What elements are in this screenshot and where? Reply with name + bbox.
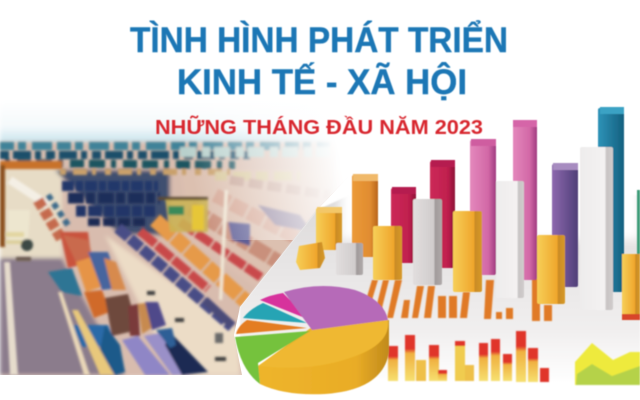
slice: teal (243, 303, 307, 323)
slice: violet (284, 286, 388, 330)
left row of containers (38, 200, 62, 240)
title line 1: TÌNH HÌNH PHÁT TRIỂN (130, 20, 508, 60)
chart: 3D pie (235, 286, 389, 394)
road markings (4, 262, 18, 375)
dark container stacks back (62, 181, 158, 191)
slice: magenta (260, 293, 310, 320)
slice: green (235, 331, 310, 384)
bar: white tall (580, 147, 613, 310)
tree line (0, 142, 330, 150)
bar: pink left (470, 139, 496, 275)
bar: silver cube (336, 243, 363, 275)
bar: orange tall (352, 174, 378, 257)
chart: small orange bars (366, 278, 552, 321)
title line 2: KINH TẾ - XÃ HỘI (177, 62, 467, 102)
bar: crimson centre (430, 160, 455, 268)
bar: orange small (316, 207, 342, 250)
bar: gold cube (296, 242, 325, 270)
subtitle: NHỮNG THÁNG ĐẦU NĂM 2023 (155, 115, 483, 139)
chart: yellow-green area (575, 343, 640, 385)
bar: pink right (513, 120, 537, 280)
lamp pole (219, 190, 228, 300)
slice: gold (258, 320, 388, 368)
bar: white centre (496, 181, 524, 298)
photo: container port (0, 120, 340, 375)
pie side (258, 320, 389, 394)
bar: gold far right (622, 254, 640, 320)
title (130, 20, 508, 139)
bar: gold right (537, 235, 565, 304)
yellow gantry crane (165, 198, 208, 232)
near container blocks (63, 235, 92, 262)
bar: silver centre (413, 199, 442, 285)
crane (0, 161, 62, 169)
chart floor panel (240, 195, 640, 384)
chart: red and yellow bars (388, 331, 549, 382)
chart: 3D column bars (296, 107, 640, 320)
bar: teal (598, 107, 624, 292)
bar: gold left (373, 226, 402, 280)
bar: gold centre (453, 211, 482, 292)
bar: crimson small (391, 187, 416, 263)
bar: green edge (637, 190, 640, 254)
row of red and blue containers, far (118, 228, 232, 327)
slice: orange (236, 320, 307, 334)
bar: violet (552, 163, 578, 287)
